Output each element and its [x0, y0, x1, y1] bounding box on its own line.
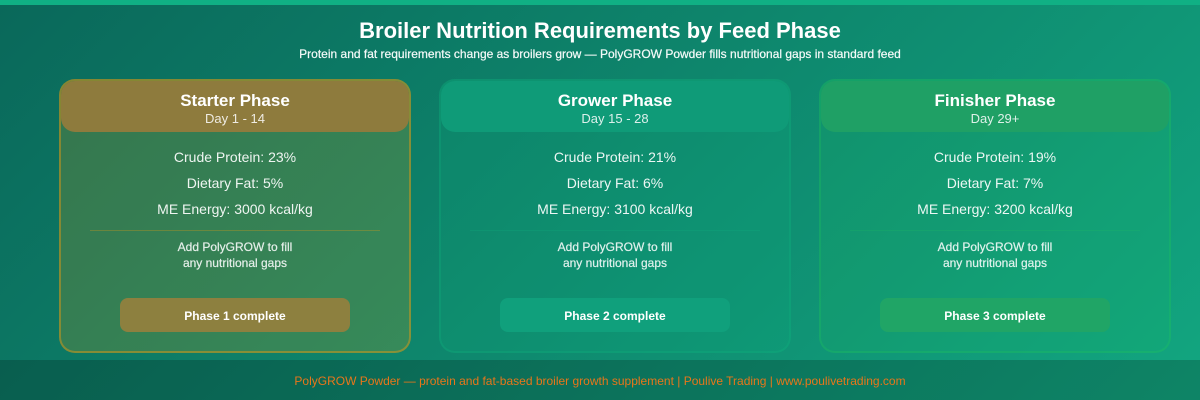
crude protein: Crude Protein: 23% [174, 149, 296, 165]
PolyGROW note: any nutritional gaps [943, 256, 1047, 270]
starter phase header [61, 81, 409, 132]
dietary fat: Dietary Fat: 5% [187, 175, 283, 191]
crude protein: Crude Protein: 19% [934, 149, 1056, 165]
PolyGROW note [178, 240, 292, 270]
panel: finisher phase [819, 79, 1171, 353]
subtitle: Protein and fat requirements change as broilers grow — PolyGROW Powder fills nutritional gaps in standard feed [299, 47, 901, 61]
grower phase header: Grower Phase [558, 91, 672, 110]
PolyGROW note [558, 240, 672, 270]
phase 3 status pill [880, 298, 1110, 332]
title: Broiler Nutrition Requirements by Feed Phase [359, 18, 841, 43]
phase 1 status pill: Phase 1 complete [184, 309, 286, 323]
footer: PolyGROW Powder — protein and fat-based broiler growth supplement | Poulive Trading | www.poulivetrading.com [294, 374, 906, 388]
footer [0, 360, 1200, 400]
phase 3 status pill: Phase 3 complete [944, 309, 1046, 323]
PolyGROW note: Add PolyGROW to fill [178, 240, 292, 254]
top accent bar [0, 0, 1200, 5]
PolyGROW note: any nutritional gaps [563, 256, 667, 270]
starter phase header: Starter Phase [180, 91, 290, 110]
starter phase header: Day 1 - 14 [205, 111, 265, 126]
phase 2 status pill: Phase 2 complete [564, 309, 666, 323]
dietary fat: Dietary Fat: 7% [947, 175, 1043, 191]
crude protein: Crude Protein: 21% [554, 149, 676, 165]
ME energy: ME Energy: 3100 kcal/kg [537, 201, 693, 217]
phase 2 status pill [500, 298, 730, 332]
PolyGROW note: Add PolyGROW to fill [938, 240, 1052, 254]
panel: starter phase [59, 79, 411, 353]
PolyGROW note: Add PolyGROW to fill [558, 240, 672, 254]
grower phase header [441, 81, 789, 132]
PolyGROW note [938, 240, 1052, 270]
finisher phase header: Day 29+ [971, 111, 1019, 126]
dietary fat: Dietary Fat: 6% [567, 175, 663, 191]
finisher phase header [821, 81, 1169, 132]
panel: grower phase [439, 79, 791, 353]
PolyGROW note: any nutritional gaps [183, 256, 287, 270]
phase 1 status pill [120, 298, 350, 332]
grower phase header: Day 15 - 28 [581, 111, 649, 126]
finisher phase header: Finisher Phase [935, 91, 1055, 110]
ME energy: ME Energy: 3000 kcal/kg [157, 201, 313, 217]
ME energy: ME Energy: 3200 kcal/kg [917, 201, 1073, 217]
